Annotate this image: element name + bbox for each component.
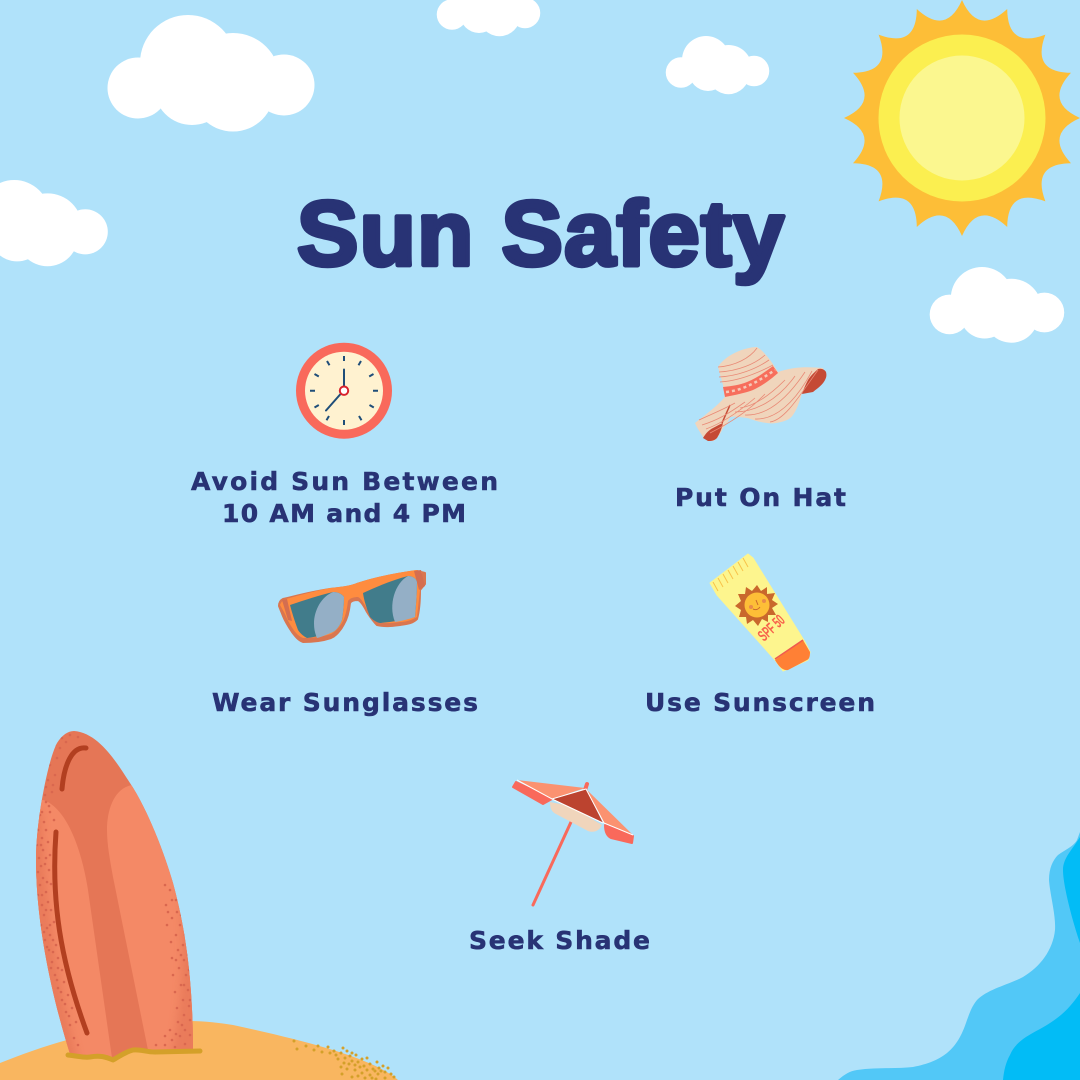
cloud: top centre <box>437 0 540 36</box>
cloud: right <box>930 267 1064 343</box>
label: wear sunglasses: Wear Sunglasses <box>212 688 478 717</box>
label: put on hat: Put On Hat <box>675 483 846 512</box>
icon: sunscreen tube: SPF 50 <box>755 612 789 645</box>
cloud: small top right <box>666 36 769 94</box>
icon: sunglasses <box>279 570 425 642</box>
icon: clock <box>296 343 392 439</box>
cloud: left edge <box>0 180 108 266</box>
icon: sun <box>844 0 1080 236</box>
title: Sun Safety <box>297 183 784 285</box>
label: avoid sun <box>191 467 498 528</box>
water: light wave <box>838 832 1080 1080</box>
label: seek shade: Seek Shade <box>469 926 650 955</box>
cloud: large top left <box>108 15 314 132</box>
icon: surfboard <box>30 725 200 1065</box>
icon: beach umbrella <box>513 780 633 905</box>
sand <box>0 1021 398 1080</box>
icon: hat <box>695 347 826 441</box>
label: avoid sun: Avoid Sun Between <box>191 467 498 496</box>
label: avoid sun: 10 AM and 4 PM <box>222 499 466 528</box>
label: use sunscreen: Use Sunscreen <box>645 688 875 717</box>
water: deep wave bottom <box>1003 993 1080 1080</box>
icon: sunscreen tube <box>710 554 810 671</box>
water: deep wave top <box>1063 837 1080 943</box>
